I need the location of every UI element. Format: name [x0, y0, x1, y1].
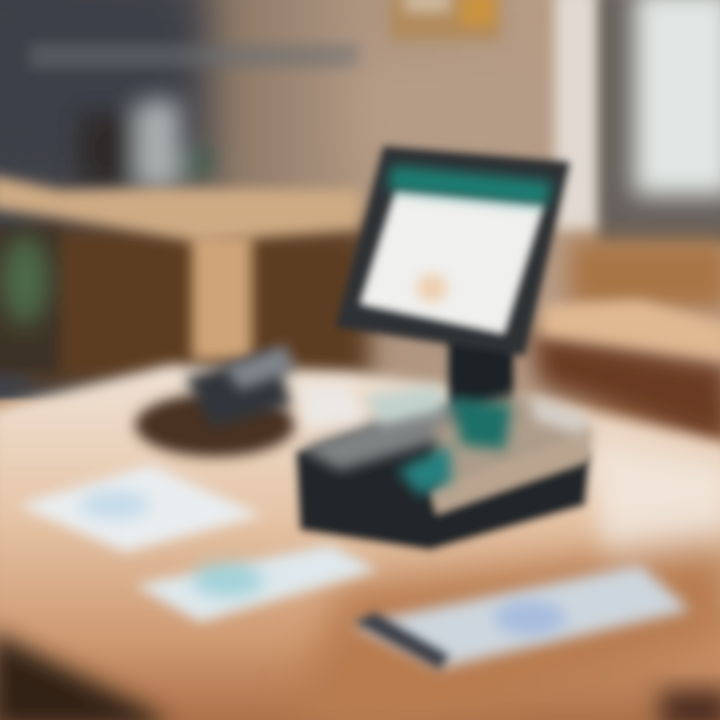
card reader on round tray [135, 345, 296, 457]
receipt printer base [296, 385, 592, 550]
window with frame [555, 0, 720, 245]
wall sign: orange [390, 0, 500, 40]
back desk with dark underside [0, 175, 370, 385]
tablet frame [340, 150, 566, 352]
tablet [340, 150, 566, 352]
paper card left [18, 465, 262, 552]
paper card center [135, 545, 378, 622]
tablet stand [448, 335, 514, 420]
phone card right [352, 565, 690, 670]
background wall [0, 0, 720, 400]
tablet orange chart mark [417, 274, 447, 302]
right side wooden counters [530, 240, 720, 450]
foreground table top [0, 365, 720, 720]
tablet teal header [388, 166, 552, 206]
shelf objects: mug and bottle [78, 100, 210, 190]
tablet screen [360, 190, 544, 334]
